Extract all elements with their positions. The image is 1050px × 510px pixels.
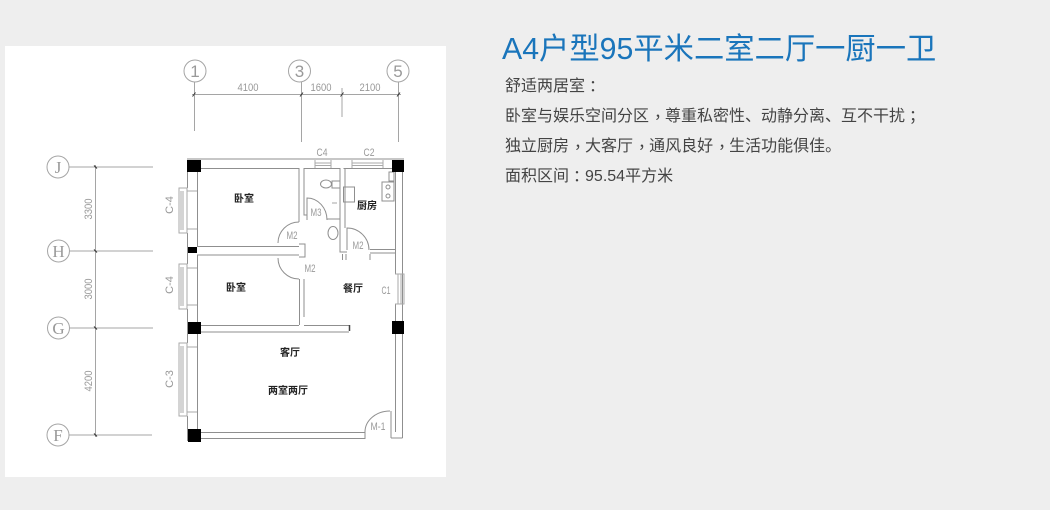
left axis and dimensions: C-4 xyxy=(164,276,176,294)
left axis and dimensions: J xyxy=(55,158,62,177)
walls xyxy=(187,159,404,441)
top axis and dimensions: 3 xyxy=(295,62,304,81)
description text xyxy=(505,77,925,185)
top axis and dimensions: 2100 xyxy=(360,82,380,94)
description text: 面积区间：95.54平方米 xyxy=(505,168,673,185)
panel: floor plan xyxy=(5,46,446,477)
description text: 舒适两居室： xyxy=(505,78,605,95)
fixtures xyxy=(320,172,394,240)
top axis and dimensions: 4100 xyxy=(238,82,258,94)
room labels: 卧室 xyxy=(226,281,246,294)
door and window labels: C4 xyxy=(316,147,328,159)
top axis and dimensions xyxy=(184,60,409,142)
door and window labels: M2 xyxy=(352,240,364,252)
left axis and dimensions: C-4 xyxy=(164,196,176,214)
left axis and dimensions: G xyxy=(52,319,65,338)
left axis and dimensions: 3300 xyxy=(83,198,95,220)
description text: 独立厨房 ，大客厅 ，通风良好 ，生活功能俱佳。 xyxy=(505,135,841,155)
columns xyxy=(187,160,404,442)
room labels: 厨房 xyxy=(357,199,377,212)
left axis and dimensions: 3000 xyxy=(83,278,95,300)
left axis and dimensions: 4200 xyxy=(83,370,95,392)
door and window labels: M-1 xyxy=(370,421,386,433)
door and window labels: M3 xyxy=(310,207,322,219)
description text: 卧室与娱乐空间分区 ，尊重私密性、动静分离、互不干扰； xyxy=(505,105,925,125)
title: A4户型95平米二室二厅一厨一卫 xyxy=(502,33,936,66)
left axis and dimensions: F xyxy=(53,426,63,445)
top axis and dimensions: 1600 xyxy=(310,82,332,94)
top axis and dimensions: 1 xyxy=(190,62,200,81)
top axis and dimensions: 5 xyxy=(393,62,403,81)
room labels: 卧室 xyxy=(234,192,254,205)
door and window labels: M2 xyxy=(304,263,316,275)
door and window labels: C2 xyxy=(364,147,374,159)
doors xyxy=(278,198,390,432)
door and window labels: M2 xyxy=(286,230,298,242)
door and window labels: C1 xyxy=(382,285,390,297)
left axis and dimensions: C-3 xyxy=(164,370,176,388)
door and window labels xyxy=(286,147,390,433)
left axis and dimensions xyxy=(47,156,176,446)
left axis and dimensions: H xyxy=(52,242,65,261)
room labels: 客厅 xyxy=(280,346,300,359)
room labels: 餐厅 xyxy=(343,282,363,295)
room labels xyxy=(226,192,377,397)
room labels: 两室两厅 xyxy=(268,384,308,397)
windows xyxy=(179,160,404,416)
